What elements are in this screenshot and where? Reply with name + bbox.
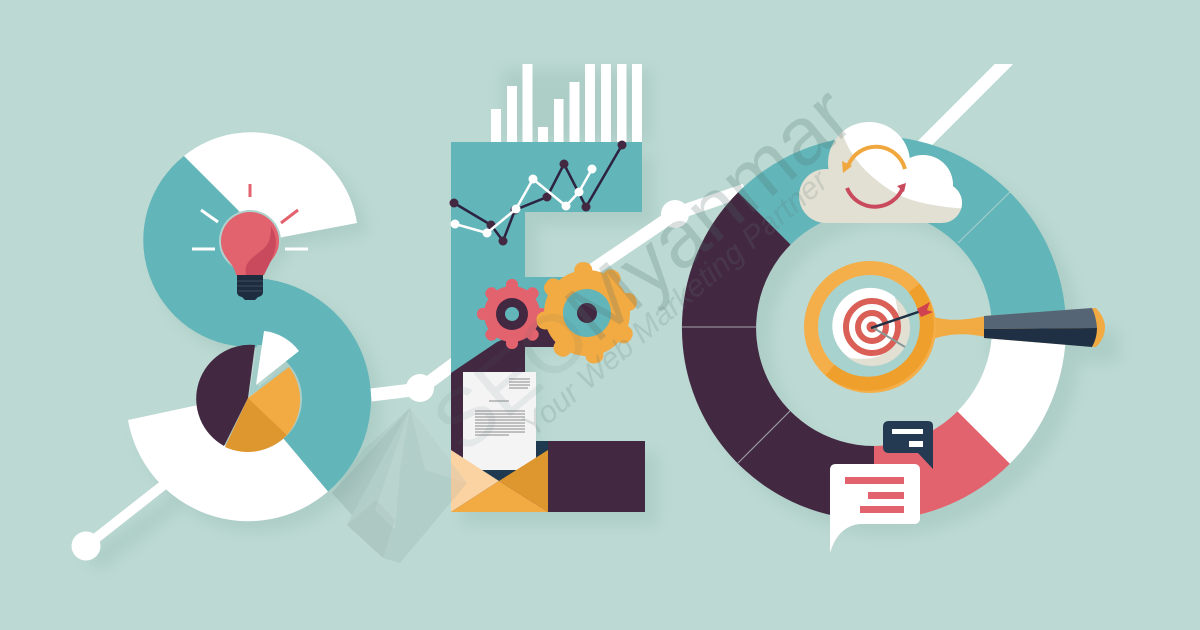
trend line xyxy=(72,60,1008,560)
O purple segment xyxy=(682,192,874,520)
S white upper arc xyxy=(184,132,357,241)
SEO infographic xyxy=(72,64,1117,564)
E teal body xyxy=(451,142,642,373)
icon: orange gear xyxy=(531,258,643,369)
letter S xyxy=(128,132,371,521)
O red segment xyxy=(874,411,1010,520)
icon: light bulb xyxy=(192,184,308,300)
S teal body xyxy=(143,156,371,492)
icon: red gear xyxy=(477,279,547,349)
letter E xyxy=(450,64,645,512)
pie chart xyxy=(196,331,300,452)
O teal segment xyxy=(738,136,1066,328)
S white lower arc xyxy=(128,405,328,521)
watermark logo xyxy=(332,408,467,563)
E bar chart xyxy=(491,64,642,142)
watermark tagline: Your Web Marketing Partner xyxy=(515,162,836,443)
O white segment xyxy=(957,328,1066,464)
icon: navy chat bubble xyxy=(883,421,933,469)
letter O xyxy=(682,115,1105,553)
icon: document and envelope xyxy=(451,372,548,512)
icon: cloud sync xyxy=(799,122,962,223)
line chart xyxy=(450,140,626,246)
E purple body xyxy=(451,305,645,512)
icon: white chat bubble xyxy=(830,464,920,553)
watermark brand text: SEOMyanmar xyxy=(416,69,869,470)
icon: magnifier with target xyxy=(811,268,1105,386)
